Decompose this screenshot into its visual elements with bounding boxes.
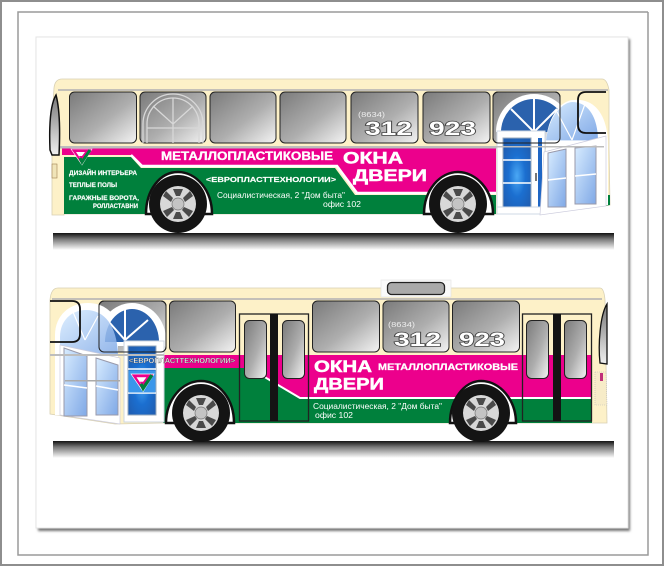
windshield: [50, 95, 60, 155]
roof sign: [381, 280, 451, 297]
overlaid window edge: [99, 301, 166, 352]
front wheel arch: [450, 381, 516, 423]
front wheel: [452, 384, 510, 442]
phone: 923: [459, 330, 505, 351]
pale arch glass: [60, 310, 118, 355]
headline: МЕТАЛЛОПЛАСТИКОВЫЕ: [161, 149, 333, 163]
window arch outline: [143, 94, 203, 143]
windows: [99, 301, 520, 352]
office: офис 102: [323, 200, 362, 209]
phone: (8634): [388, 322, 415, 329]
front wheel arch: [424, 172, 493, 214]
phone: 312: [365, 119, 412, 140]
ground shadow: [53, 441, 614, 458]
rear wheel arch: [146, 172, 212, 214]
magenta band: [163, 355, 592, 399]
window illustration: [496, 94, 608, 215]
body: [50, 288, 607, 424]
magenta band front end: [604, 148, 608, 192]
rear wheel arch: [166, 381, 234, 423]
green panel: [64, 157, 496, 214]
stripe across windows: [496, 146, 604, 148]
pale arch: [546, 100, 608, 212]
blue arch: [98, 303, 166, 346]
rail across open door: [65, 380, 120, 382]
front marker light: [600, 373, 603, 381]
green panel front end: [604, 195, 610, 206]
okna: ОКНА: [343, 148, 403, 168]
dveri: ДВЕРИ: [314, 374, 384, 394]
back window: [50, 301, 80, 342]
white card: [36, 37, 628, 528]
phone: 312: [394, 330, 441, 351]
stripe across window: [50, 354, 164, 356]
rear door: [240, 314, 308, 421]
body: [50, 79, 610, 215]
dveri: ДВЕРИ: [353, 166, 427, 185]
blue arch: [496, 94, 572, 132]
front marker: [595, 372, 607, 405]
front window: [578, 92, 606, 133]
open door: [540, 136, 606, 215]
glass door: [124, 341, 164, 422]
okna: ОКНА: [314, 357, 372, 376]
green panel: [163, 368, 592, 423]
white card shadow: [38, 39, 630, 531]
office: офис 102: [315, 411, 354, 420]
roof stripe: [52, 298, 602, 300]
headline: МЕТАЛЛОПЛАСТИКОВЫЕ: [378, 362, 518, 373]
magenta band: [62, 148, 496, 193]
services text: ТЕПЛЫЕ ПОЛЫ: [69, 182, 117, 189]
services text: ДИЗАЙН ИНТЕРЬЕРА: [69, 168, 137, 177]
glass door: [497, 131, 545, 214]
pale arch frame: [55, 303, 118, 420]
address: Социалистическая, 2 "Дом быта": [313, 402, 442, 411]
bus 2: door side: [50, 280, 614, 458]
overlaid window edge: [493, 92, 560, 143]
side stripe: [60, 146, 606, 148]
phone: (8634): [358, 112, 385, 119]
logo: [128, 370, 156, 392]
white stripe: [131, 155, 496, 193]
services text: РОЛЛАСТАВНИ: [93, 203, 138, 210]
window illustration: [55, 303, 166, 424]
phone: 923: [429, 119, 476, 140]
services text: [69, 168, 139, 210]
rear wheel: [149, 175, 207, 233]
open door: [60, 345, 120, 424]
front wheel: [429, 175, 487, 233]
handle: [535, 173, 537, 181]
bus 1: curb side: [50, 79, 614, 250]
ground shadow: [53, 233, 614, 250]
front door: [522, 314, 592, 421]
rear light: [52, 164, 57, 178]
roof stripe: [58, 89, 608, 91]
phone: [358, 112, 476, 140]
logo: [71, 149, 92, 165]
windows: [70, 92, 560, 143]
windshield: [599, 304, 607, 364]
rear wheel: [172, 384, 230, 442]
company name: <ЕВРОПЛАСТТЕХНОЛОГИИ>: [206, 175, 337, 184]
services text: ГАРАЖНЫЕ ВОРОТА,: [69, 195, 139, 202]
phone: [388, 322, 505, 351]
address: Социалистическая, 2 "Дом быта": [217, 191, 345, 200]
company name: <ЕВРОПЛАСТТЕХНОЛОГИИ>: [129, 356, 236, 365]
white stripe: [246, 366, 592, 398]
